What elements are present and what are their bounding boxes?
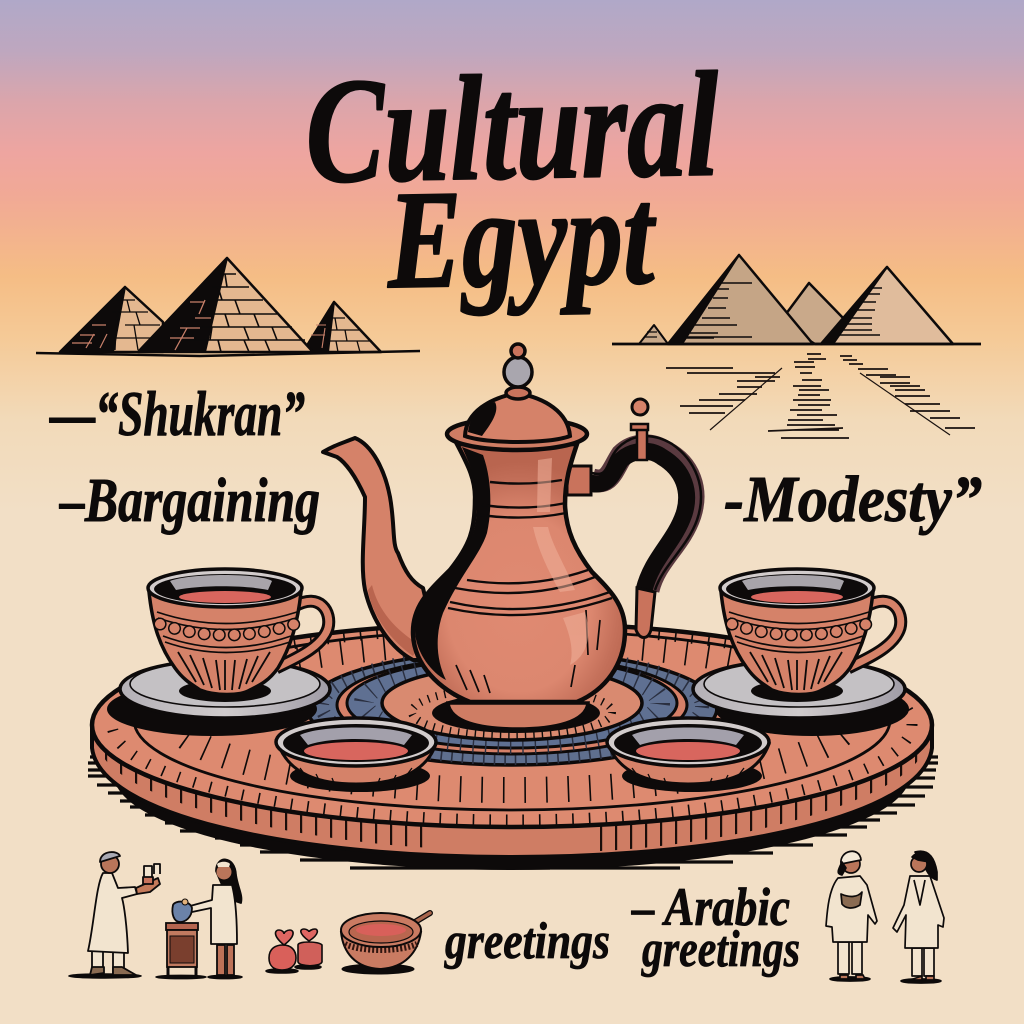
- spout: [323, 438, 440, 660]
- title line two: Egypt: [385, 158, 658, 318]
- pot foot shadow: [432, 693, 600, 733]
- ground line: [36, 351, 420, 356]
- label: Arabic greetings: [631, 877, 800, 978]
- right small bowl: [607, 718, 769, 792]
- label: Bargaining: –Bargaining: [59, 467, 320, 535]
- left saucer and cup: [107, 569, 330, 736]
- desert road hatching: [666, 354, 975, 438]
- word: Arabic: – Arabic: [631, 877, 790, 937]
- label: greetings: greetings: [444, 913, 610, 970]
- tray rim: [92, 725, 932, 857]
- word: greetings: greetings: [641, 921, 800, 978]
- right saucer and cup: [693, 569, 909, 736]
- title line one: Cultural: [304, 41, 720, 215]
- woven blue ring: [307, 651, 717, 765]
- lid brim: [447, 418, 587, 450]
- left cup handle: [276, 601, 329, 668]
- side table with blue pot: [156, 899, 206, 978]
- label: Shukran: —“Shukran”: [49, 378, 305, 449]
- label: Modesty: -Modesty”: [724, 463, 982, 536]
- left small bowl: [276, 718, 436, 792]
- figure: man offering gift: [69, 852, 160, 978]
- round tray: [88, 623, 938, 870]
- dark reflection on pot: [415, 447, 490, 680]
- decorated bowl with spoon: [341, 913, 430, 974]
- pot body: [413, 444, 625, 702]
- tray top surface: [92, 623, 932, 827]
- right cup handle: [848, 601, 901, 668]
- left pyramids: [36, 258, 420, 356]
- pot foot: [448, 703, 588, 729]
- knob: [504, 344, 532, 399]
- figure: woman with pot: [190, 859, 242, 978]
- left saucer: [107, 660, 330, 736]
- horizon line: [612, 343, 981, 345]
- right pyramids: [612, 255, 981, 344]
- figure: person in cap: [826, 851, 877, 981]
- right saucer: [693, 660, 909, 736]
- tray cast shadow streaks: [88, 680, 938, 870]
- handle: [567, 399, 701, 638]
- left cup bowl: [149, 592, 301, 694]
- engraved bands: [448, 480, 612, 615]
- teapot: [323, 344, 701, 733]
- left cup rim and tea: [148, 569, 302, 607]
- two heart gift bags: [266, 929, 322, 973]
- lid dome: [465, 393, 570, 442]
- highlights on pot: [533, 458, 588, 665]
- right cup bowl: [721, 592, 873, 694]
- title: [304, 41, 720, 318]
- right cup rim and tea: [720, 569, 874, 607]
- figure: person with long hair: [893, 851, 944, 983]
